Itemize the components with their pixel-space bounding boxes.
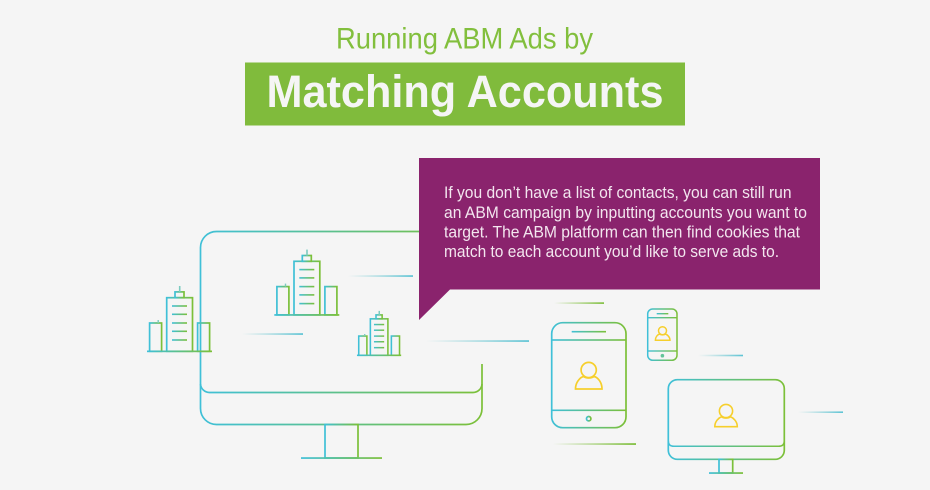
large desktop monitor (200, 232, 482, 459)
motion lines around desktop monitor (242, 275, 529, 342)
callout: matching accounts explanation: an ABM campaign by inputting accounts you want to (444, 203, 807, 222)
heading banner: Matching Accounts: Matching Accounts (266, 66, 664, 117)
icon: phone with user (648, 309, 677, 360)
icon: desktop with user (668, 380, 784, 474)
title: Running ABM Ads by: Running ABM Ads by (336, 22, 593, 56)
icon: small building cluster (357, 311, 401, 356)
callout: matching accounts explanation (419, 158, 820, 320)
callout: matching accounts explanation: target. The ABM platform can then find cookies that (444, 222, 800, 242)
icon: building cluster, centre (274, 250, 339, 316)
callout: matching accounts explanation: If you don’t have a list of contacts, you can still run (444, 183, 792, 202)
icon: tablet with user (552, 323, 626, 428)
motion lines around devices (553, 302, 843, 445)
callout: matching accounts explanation: match to each account you’d like to serve ads to. (444, 242, 779, 261)
icon: large building cluster, left (147, 286, 212, 352)
